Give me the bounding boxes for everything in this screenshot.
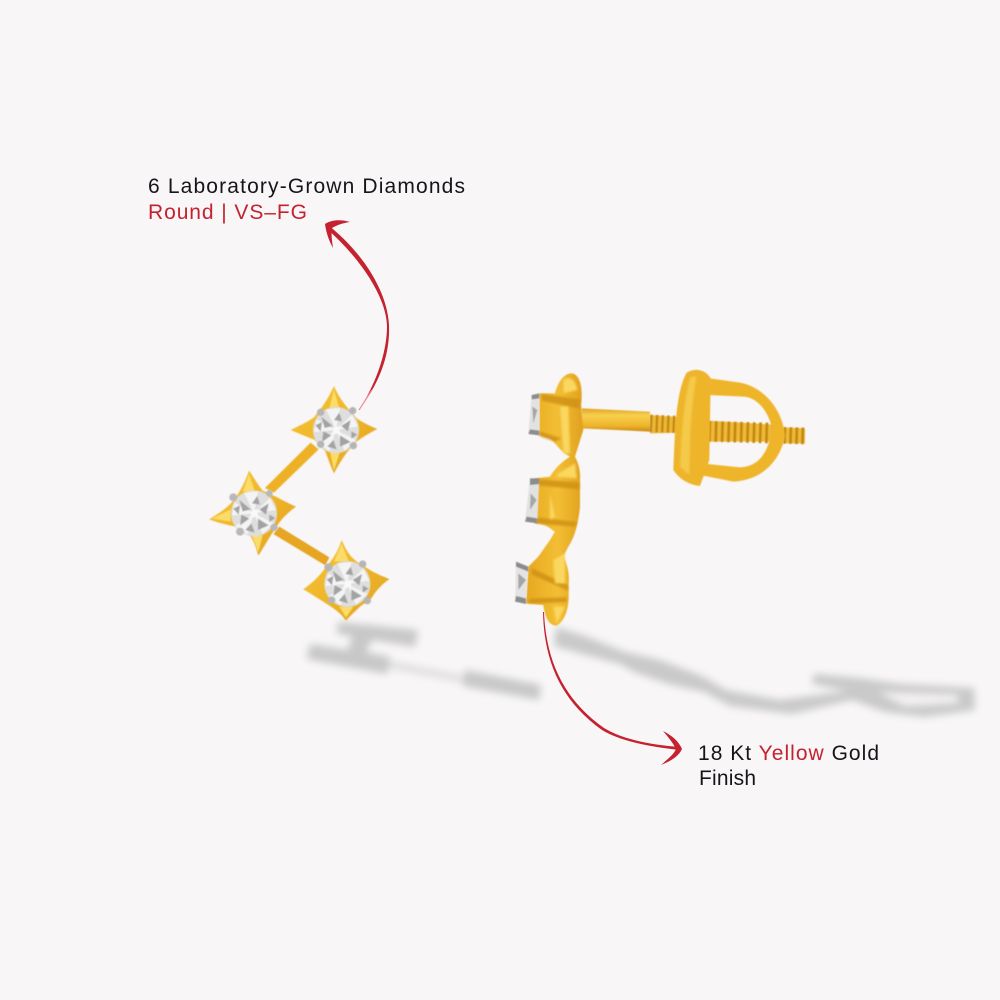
mount highlights [550, 378, 577, 623]
thread tip [783, 427, 805, 443]
middle star highlights [212, 474, 263, 552]
disc highlight [680, 377, 697, 475]
text: diamonds label: Round | VS–FG [148, 201, 307, 224]
side diamonds [515, 393, 539, 604]
earring: side view [515, 370, 805, 626]
bottom star prongs [324, 560, 371, 604]
stone mounts body [526, 373, 583, 626]
shadow: side earring [554, 627, 975, 717]
star setting bottom [303, 540, 389, 621]
text: diamonds label [148, 175, 465, 224]
screw back loop [700, 378, 785, 482]
text: gold label [698, 742, 879, 790]
disc ribs [682, 383, 722, 463]
back thread [708, 421, 780, 442]
arrow: gold callout [543, 612, 682, 765]
text: gold label: Finish [699, 767, 756, 790]
screw back disc [673, 370, 711, 486]
middle star prongs [229, 490, 278, 536]
top star prongs [317, 407, 357, 449]
text: gold label: 18 Kt Yellow Gold [698, 742, 879, 765]
bottom star highlights [334, 543, 353, 617]
star setting middle [209, 471, 296, 556]
top star highlights [329, 389, 340, 471]
text: diamonds label: 6 Laboratory-Grown Diamonds [148, 175, 465, 198]
post [582, 408, 650, 432]
earring: front view [209, 386, 389, 621]
connecting rod lower [273, 527, 329, 565]
post thread [650, 415, 683, 433]
shadow: front earring [307, 622, 541, 700]
connecting rod upper [265, 443, 319, 493]
star setting top [291, 386, 377, 473]
mount shading [528, 394, 580, 603]
arrow: diamonds callout [325, 220, 389, 410]
